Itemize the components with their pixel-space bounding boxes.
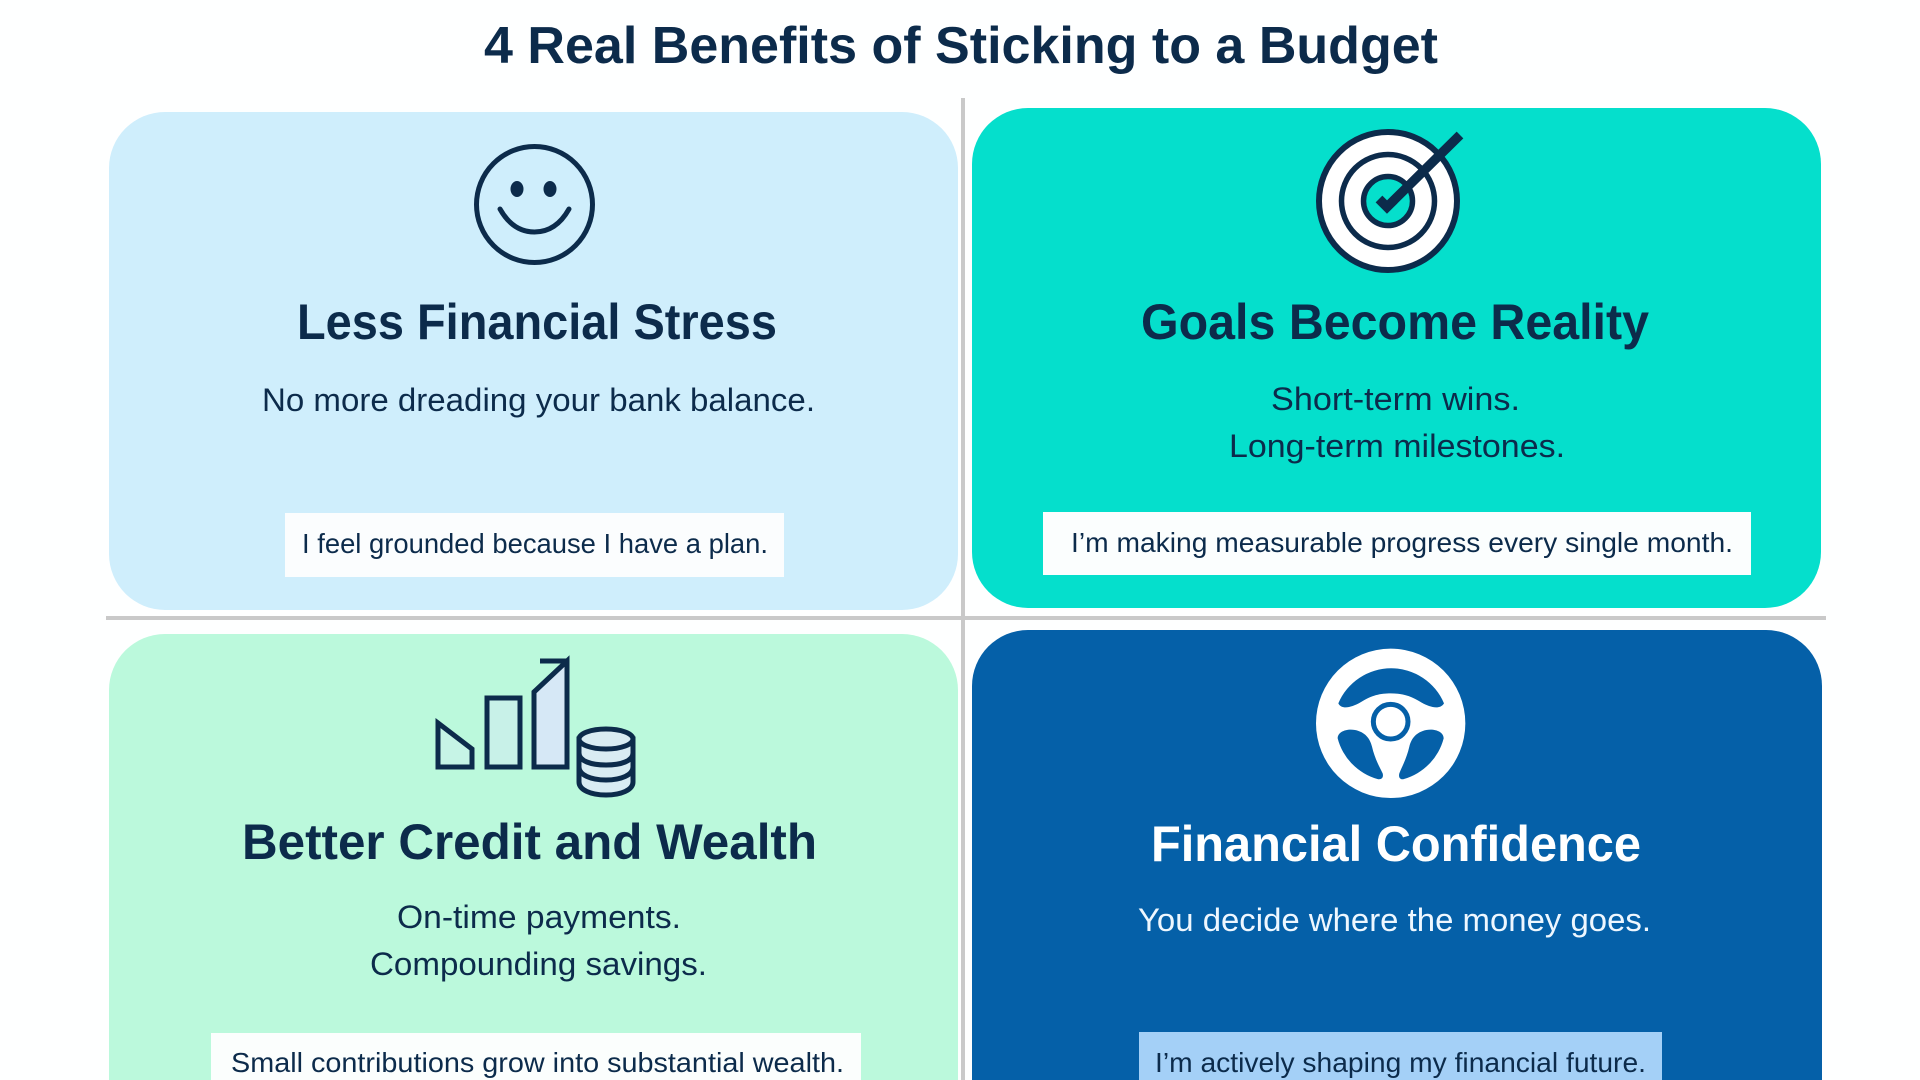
icon: rising bars and coins	[438, 661, 633, 795]
panel: better credit and wealth	[109, 634, 958, 1080]
panel: financial confidence	[972, 630, 1822, 1080]
body text: wins and milestones	[1229, 381, 1565, 464]
quote box: measurable progress: I’m making measurable progress every single month.	[1071, 527, 1733, 558]
heading: better credit and wealth: Better Credit and Wealth	[242, 814, 817, 870]
icon: smiley face	[476, 146, 592, 262]
body text: payments and savings	[370, 899, 707, 982]
body text: payments and savings: Compounding savings.	[370, 946, 707, 982]
quote box: small contributions: Small contributions grow into substantial wealth.	[231, 1047, 844, 1078]
heading: financial confidence: Financial Confidence	[1151, 816, 1641, 872]
panel: goals become reality	[972, 108, 1821, 608]
quote box: grounded: I feel grounded because I have a plan.	[302, 528, 768, 559]
quote box: shaping future: I’m actively shaping my financial future.	[1155, 1047, 1646, 1078]
body text: money decisions: You decide where the money goes.	[1138, 902, 1651, 938]
heading: less financial stress: Less Financial Stress	[297, 294, 777, 350]
body text: payments and savings: On-time payments.	[397, 899, 681, 935]
quote box: small contributions	[211, 1033, 861, 1080]
quote box: measurable progress	[1043, 512, 1751, 575]
title: 4 Real Benefits of Sticking to a Budget	[484, 17, 1438, 75]
icon: target with check	[1319, 132, 1460, 270]
quote box: grounded	[285, 513, 784, 577]
quote box: shaping future	[1139, 1032, 1662, 1080]
body text: bank balance: No more dreading your bank balance.	[262, 382, 815, 418]
body text: wins and milestones: Short-term wins.	[1271, 381, 1520, 417]
body text: wins and milestones: Long-term milestones.	[1229, 428, 1565, 464]
panel: less financial stress	[109, 112, 958, 610]
heading: goals become reality: Goals Become Reality	[1141, 294, 1649, 350]
icon: steering wheel	[1316, 649, 1465, 798]
